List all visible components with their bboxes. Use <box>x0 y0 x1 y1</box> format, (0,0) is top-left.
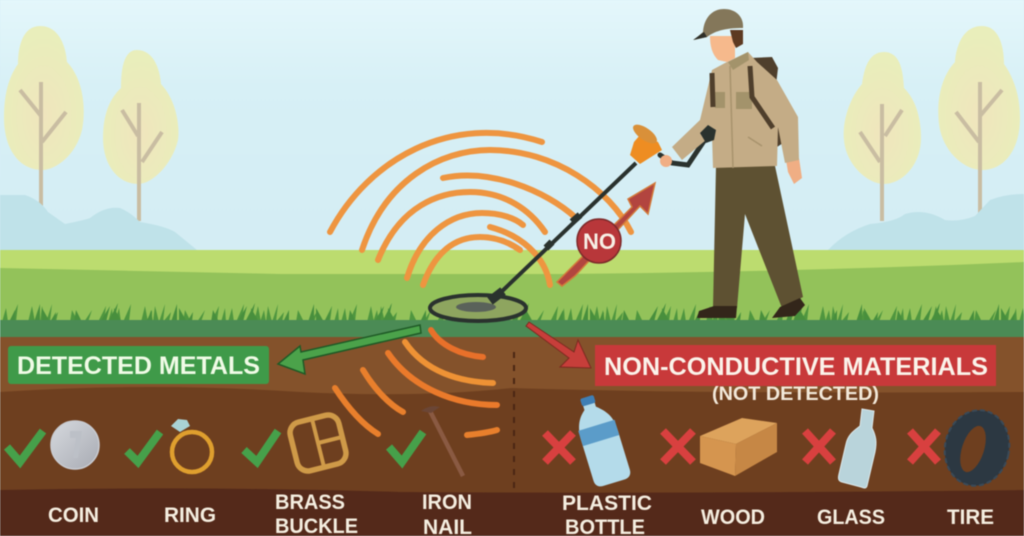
tree far right <box>938 26 1020 214</box>
item: coin <box>7 421 99 527</box>
item: plastic bottle: PLASTIC <box>562 492 652 515</box>
search coil <box>430 295 526 321</box>
signal waves above ground <box>330 133 631 285</box>
handle <box>660 138 706 165</box>
tree left <box>103 50 178 221</box>
straps <box>712 66 773 128</box>
heading: detected metals: DETECTED METALS <box>17 352 260 380</box>
item: iron nail <box>389 406 472 536</box>
soil layers <box>0 337 1024 536</box>
heading: non-conductive materials <box>595 345 996 405</box>
tree far left <box>4 26 84 210</box>
heading: non-conductive materials: (NOT DETECTED) <box>712 384 879 405</box>
distant hills <box>0 194 1024 250</box>
trousers <box>713 166 803 308</box>
item: glass: GLASS <box>817 506 885 529</box>
control box <box>630 135 662 164</box>
item: wood: WOOD <box>701 506 765 529</box>
heading: non-conductive materials: NON-CONDUCTIVE MATERIALS <box>604 353 988 381</box>
grip <box>700 125 716 143</box>
person with backpack <box>660 9 805 318</box>
item: wood <box>663 418 777 529</box>
grass field <box>0 250 1024 338</box>
sky background <box>0 0 1024 252</box>
cap <box>694 9 743 40</box>
red arrow to non-conductive materials <box>526 322 591 368</box>
NO rejected signal arrow: NO <box>583 229 616 254</box>
item: glass <box>805 409 885 529</box>
item: coin: COIN <box>48 504 99 527</box>
item: tire <box>910 404 1016 529</box>
item: brass buckle: BRASS <box>275 491 345 514</box>
NO rejected signal arrow <box>557 183 655 286</box>
item: ring: RING <box>164 504 216 527</box>
green arrow to detected metals <box>278 325 421 374</box>
right hand <box>786 158 802 184</box>
boots <box>697 306 737 318</box>
metal detector <box>430 121 706 321</box>
tree right <box>844 52 921 221</box>
item: iron nail: IRON <box>422 491 472 514</box>
face <box>710 36 735 62</box>
signal waves underground <box>335 330 497 435</box>
item: plastic bottle <box>545 391 652 536</box>
item: brass buckle <box>244 413 358 536</box>
item: ring <box>127 419 216 527</box>
jacket <box>672 52 799 168</box>
item: tire: TIRE <box>947 506 994 529</box>
heading: detected metals <box>8 346 269 384</box>
shaft <box>497 163 636 296</box>
backpack <box>750 57 783 149</box>
hand on grip <box>660 155 672 167</box>
